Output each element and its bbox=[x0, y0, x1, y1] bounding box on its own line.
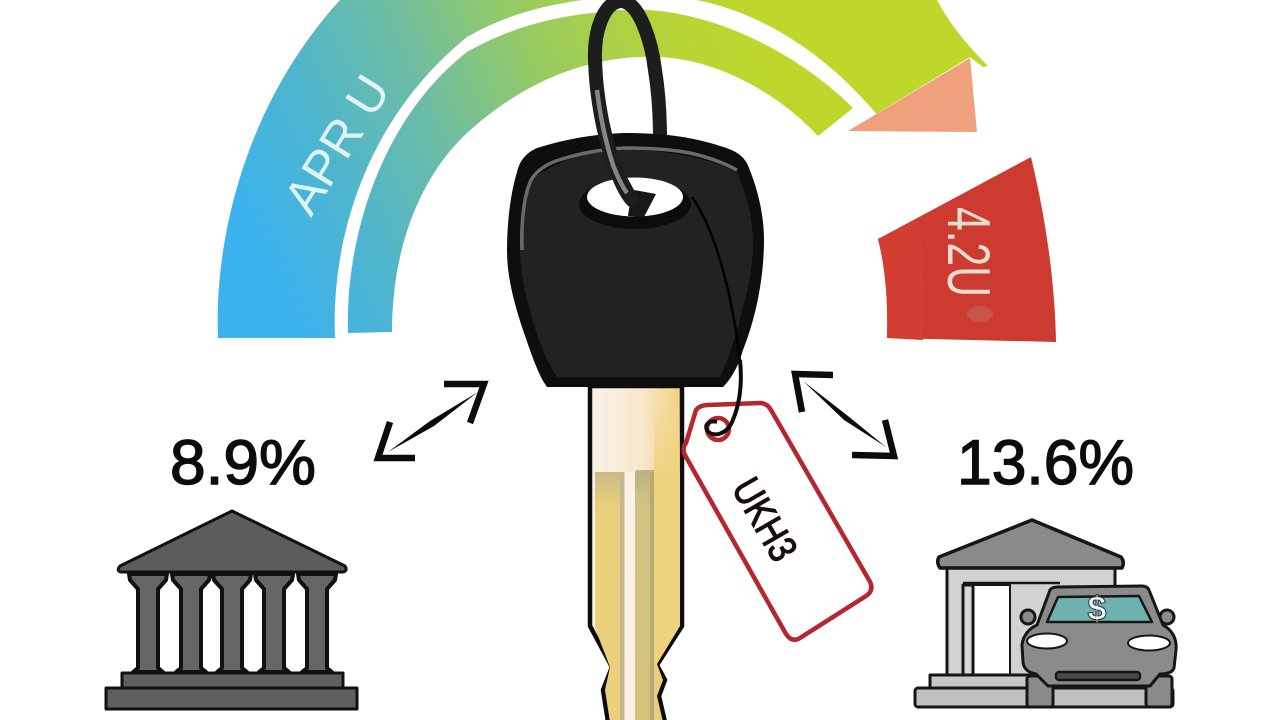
tag hole bbox=[707, 418, 729, 440]
ring clip in key hole bbox=[627, 177, 656, 217]
icon: dealership with car bbox=[915, 520, 1176, 707]
key head highlight bbox=[522, 148, 737, 250]
gauge label: 4.2U: 4.2U bbox=[935, 207, 1002, 297]
bank column 5 bbox=[298, 574, 336, 672]
icon: bank with columns bbox=[106, 511, 357, 709]
dealership roof bbox=[938, 520, 1123, 568]
bank column 1 bbox=[129, 574, 167, 672]
blade right groove edge bbox=[650, 472, 654, 720]
bank lower step bbox=[106, 688, 357, 709]
dealership door frame bbox=[963, 585, 973, 675]
APR gauge bbox=[218, 0, 1056, 342]
key hole shadow bbox=[579, 179, 691, 229]
key hole bbox=[587, 178, 683, 216]
car right headlight bbox=[1128, 636, 1170, 650]
gauge label: APR U: APR U bbox=[273, 65, 401, 224]
gauge peach segment bbox=[848, 58, 977, 132]
gauge outer band bbox=[218, 0, 988, 338]
dealership wall bbox=[947, 568, 1115, 675]
left arrow upper head bbox=[444, 384, 484, 423]
bank roof bbox=[118, 511, 346, 572]
left rate: 8.9%: 8.9% bbox=[170, 428, 316, 498]
blade lower notch right face bbox=[654, 664, 663, 720]
red segment shading bbox=[878, 218, 924, 340]
blade left groove edge bbox=[620, 472, 624, 720]
key head bbox=[507, 133, 764, 387]
bank column 3 bbox=[213, 574, 251, 672]
bank upper step bbox=[122, 673, 343, 688]
blade body bbox=[590, 386, 682, 720]
bank column 2 bbox=[172, 574, 210, 672]
car bbox=[1021, 586, 1176, 707]
car body bbox=[1022, 586, 1176, 686]
right rate: 13.6%: 13.6% bbox=[957, 428, 1134, 498]
right arrow lower head bbox=[852, 420, 894, 456]
tag handwriting: UKH3 bbox=[723, 470, 805, 569]
key ring back strand bbox=[620, 1, 660, 138]
car right wheel bbox=[1146, 676, 1172, 707]
car left wheel bbox=[1027, 676, 1053, 707]
key blade bbox=[590, 386, 682, 720]
blade right groove bbox=[635, 470, 654, 720]
blade left groove bbox=[595, 472, 624, 720]
car left mirror bbox=[1021, 610, 1035, 624]
dealership lower step bbox=[915, 688, 1173, 707]
right arrow upper head bbox=[795, 374, 833, 412]
tag cord bbox=[706, 360, 741, 434]
windshield dollar sign: $ bbox=[1088, 590, 1107, 628]
blade centre channel bbox=[624, 472, 635, 720]
price tag bbox=[684, 360, 871, 640]
car right mirror bbox=[1160, 610, 1174, 624]
key ring highlight bbox=[597, 90, 627, 193]
key head face bbox=[520, 150, 753, 377]
blade right yellow face bbox=[654, 400, 680, 664]
dealership door bbox=[973, 585, 1010, 675]
dealership lintel line bbox=[963, 582, 1060, 584]
right arrow shaft bbox=[803, 381, 886, 447]
left double arrow bbox=[378, 384, 484, 458]
car windshield bbox=[1047, 596, 1152, 622]
key ring front strand bbox=[595, 1, 632, 200]
dealership upper step bbox=[930, 675, 1030, 688]
left arrow lower head bbox=[378, 422, 415, 458]
right double arrow bbox=[795, 374, 894, 456]
faint mark under red label bbox=[967, 306, 993, 322]
car grille bbox=[1056, 672, 1140, 680]
bank column 4 bbox=[255, 574, 293, 672]
car key bbox=[507, 1, 764, 720]
tag outline bbox=[684, 403, 871, 640]
gauge red segment bbox=[878, 157, 1056, 342]
thin cord across key head bbox=[692, 197, 740, 362]
car left headlight bbox=[1027, 634, 1067, 648]
left arrow shaft bbox=[388, 392, 478, 452]
gauge inner band bbox=[348, 10, 853, 333]
